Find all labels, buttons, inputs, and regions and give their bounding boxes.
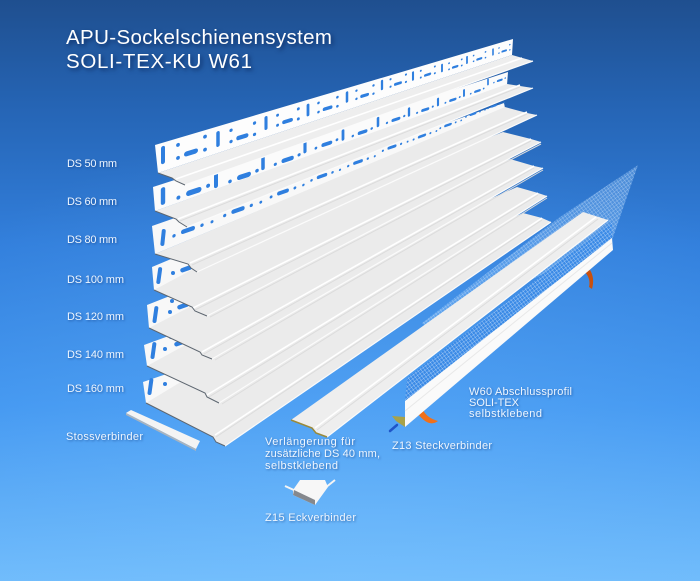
DS labels: DS 140 mm [67,349,124,361]
label: W60 Abschlussprofil: SOLI-TEX [469,397,520,409]
plate with holes [155,39,513,173]
title: SOLI-TEX-KU W61 [66,50,252,73]
DS labels: DS 60 mm [67,196,117,208]
profile DS 140 mm [144,187,547,404]
profile DS 100 mm [152,128,541,317]
DS labels: DS 120 mm [67,311,124,323]
title: APU-Sockelschienensystem [66,26,332,49]
label: W60 Abschlussprofil: selbstklebend [469,408,542,420]
label: Z13 Steckverbinder: Z13 Steckverbinder [392,440,492,452]
label: Verlängerung [265,436,380,472]
label: Verlängerung: Verlängerung für [265,436,355,448]
mesh band [405,222,612,402]
DS labels: DS 160 mm [67,383,124,395]
profile DS 50 mm [155,39,533,185]
label: Verlängerung: zusätzliche DS 40 mm, [265,448,380,460]
icon: orange tape front [418,410,438,423]
plate with holes [152,101,505,254]
W60 profile with mesh and tapes [390,222,613,431]
W60 mesh fan behind profiles [422,165,638,330]
profile DS 160 mm [143,213,551,446]
profile DS 120 mm [147,159,543,360]
profile DS 60 mm [153,72,533,227]
label: Verlängerung: selbstklebend [265,460,338,472]
icon: Z13 connector [390,425,397,431]
DS labels [67,158,124,395]
plate with holes [153,72,508,211]
extension profile DS 40 mm [291,212,608,437]
icon: orange tape rear [585,270,593,289]
white bead [405,238,613,427]
icon: Stossverbinder [126,410,200,451]
icon: end cap [392,416,405,427]
label: Stossverbinder: Stossverbinder [66,431,143,443]
DS labels: DS 100 mm [67,274,124,286]
icon: Z15 Eckverbinder [285,480,335,505]
DS labels: DS 50 mm [67,158,117,170]
label: W60 Abschlussprofil: W60 Abschlussprofil [469,386,572,398]
DS labels: DS 80 mm [67,234,117,246]
label: Z15 Eckverbinder: Z15 Eckverbinder [265,512,356,524]
title [66,26,332,73]
profile DS 80 mm [152,101,537,272]
label: W60 Abschlussprofil [469,386,572,420]
